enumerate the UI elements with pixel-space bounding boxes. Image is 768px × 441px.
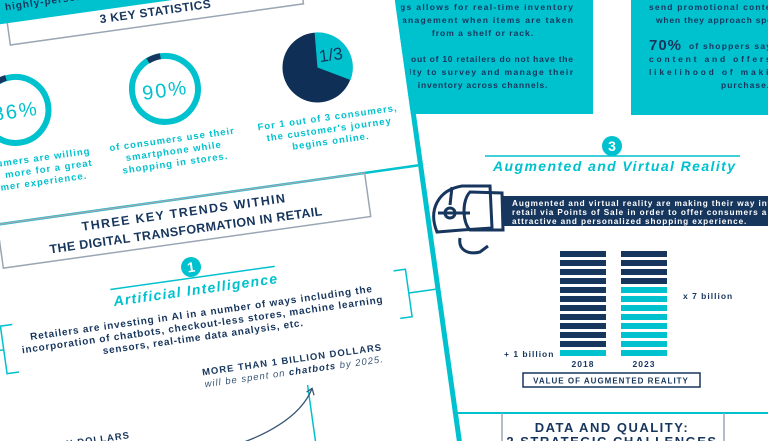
section 1 heading: Artificial Intelligence [111, 270, 278, 309]
stat ring 86% [0, 68, 95, 198]
teal box: inventory [380, 0, 593, 114]
callout: chatbots: MORE THAN 1 BILLION DOLLARS [201, 342, 383, 378]
bar chart: value of AR: 2018 [572, 359, 594, 369]
bar chart: value of AR: 2023 [633, 359, 655, 369]
teal box: inventory: from a shelf or rack. [432, 28, 534, 38]
stat ring 90%: 90% [141, 77, 190, 105]
section 3 heading [485, 136, 740, 174]
stat ring 90% [98, 47, 239, 178]
bar chart: value of AR: x 7 billion [683, 291, 733, 301]
teal box: promotions [631, 0, 768, 115]
section 1 heading [107, 245, 278, 309]
teal box: inventory: ity to survey and manage their [409, 67, 574, 77]
section 3 heading: Augmented and Virtual Reality [492, 158, 736, 174]
pie chart 1/3: 1/3 [318, 44, 344, 66]
bar chart: value of AR: + 1 billion [504, 349, 554, 359]
teal box: inventory: inventory across channels. [418, 80, 548, 90]
left page (rotated) [0, 0, 471, 441]
pie chart 1/3: the customer's journey [266, 116, 393, 144]
callout: chatbots: will be spent on chatbots by 2025. [204, 354, 385, 390]
pie chart 1/3: begins online. [292, 131, 370, 153]
teal box: inventory: gs allows for real-time inventory [400, 2, 573, 12]
teal box: promotions: 70% [649, 37, 682, 54]
heading: data and quality [502, 413, 724, 441]
stat ring 90%: of consumers use their [109, 126, 236, 154]
paragraph: AI: sensors, real-time data analysis, etc. [102, 318, 304, 357]
pie chart 1/3 [246, 23, 402, 157]
section 1 heading: 1 [186, 259, 196, 275]
paragraph: AI: incorporation of chatbots, checkout-less stores, machine learning [21, 295, 383, 356]
heading: data and quality: DATA AND QUALITY: [535, 420, 689, 435]
label box: value of augmented reality [523, 373, 700, 387]
bar chart: value of AR [504, 251, 733, 369]
teal band: intro [0, 0, 226, 52]
right page [380, 0, 768, 441]
stats box [6, 0, 303, 45]
stat ring 90%: smartphone while [125, 140, 222, 164]
title: three key trends [0, 173, 371, 268]
pie chart 1/3: For 1 out of 3 consumers, [257, 103, 398, 133]
title: three key trends: THE DIGITAL TRANSFORMATION IN RETAIL [49, 204, 323, 256]
icon: VR headset [434, 186, 503, 253]
label box: value of augmented reality: VALUE OF AUGMENTED REALITY [533, 376, 689, 386]
text bar: AR description [503, 196, 768, 226]
arrow [218, 388, 320, 441]
text bar: AR description: attractive and personalized shopping experience. [512, 217, 747, 226]
teal box: inventory: anagement when items are taken [402, 15, 573, 25]
title: three key trends: THREE KEY TRENDS WITHIN [81, 191, 286, 234]
brackets [0, 265, 439, 395]
stat ring 90%: shopping in stores. [122, 151, 229, 177]
paragraph: AI: Retailers are investing in AI in a number of ways including the [30, 284, 373, 343]
section 3 heading: 3 [608, 138, 616, 154]
teal box: inventory: out of 10 retailers do not have the [411, 54, 573, 64]
